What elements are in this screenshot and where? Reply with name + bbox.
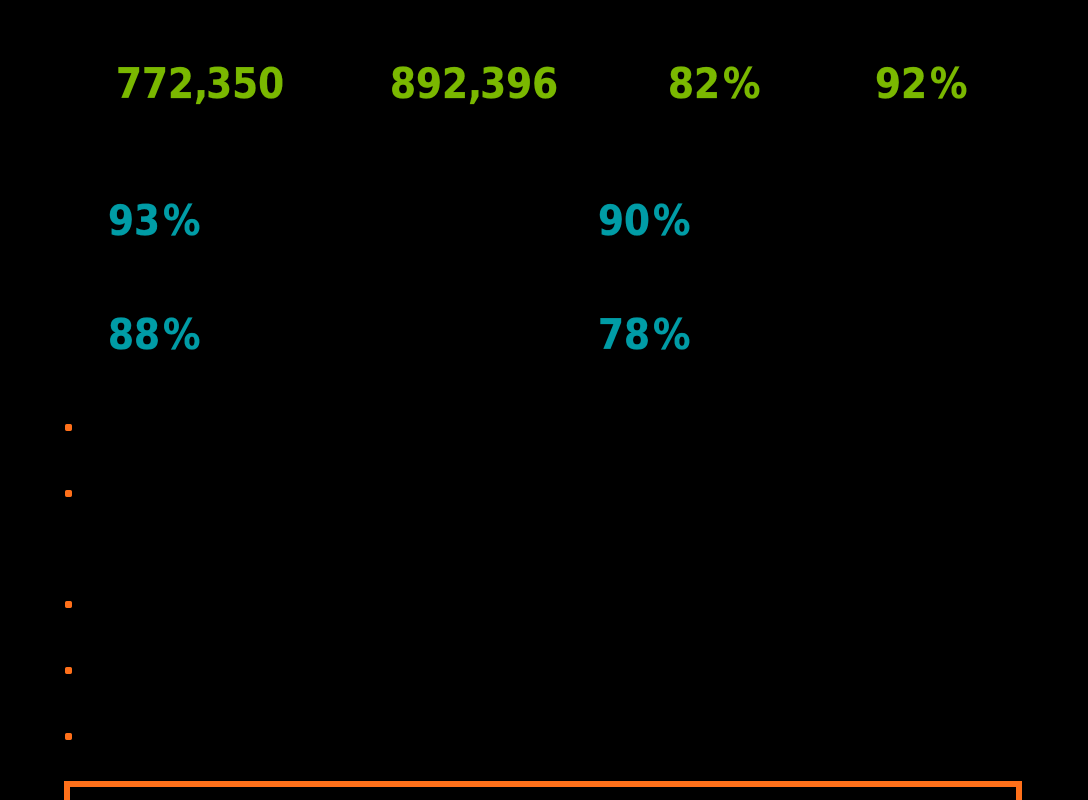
stat: 772,350: 772,350 — [116, 59, 284, 108]
stat: 78%: 78% — [598, 310, 690, 359]
stat: 88%: 88% — [108, 310, 200, 359]
stat: 82%: 82% — [668, 59, 760, 108]
stat: 92%: 92% — [875, 59, 967, 108]
callout box outline — [64, 781, 1022, 800]
bullet 2 — [65, 490, 72, 497]
bullet 1 — [65, 424, 72, 431]
stat: 93%: 93% — [108, 196, 200, 245]
bullet 4 — [65, 667, 72, 674]
stat: 892,396: 892,396 — [390, 59, 558, 108]
stat: 90%: 90% — [598, 196, 690, 245]
bullet 3 — [65, 601, 72, 608]
bullet 5 — [65, 733, 72, 740]
